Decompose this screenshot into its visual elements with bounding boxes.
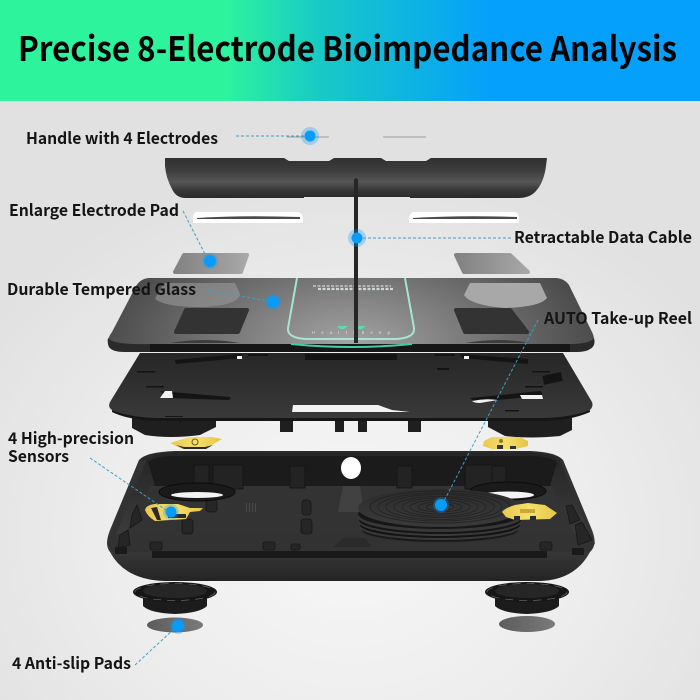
label: sensors: 4 High-precision <box>8 425 134 449</box>
callout leader lines <box>90 136 538 665</box>
callout dots <box>163 127 449 634</box>
cable hole <box>341 457 361 479</box>
frame feet <box>132 418 572 438</box>
frame slots and cut-outs <box>137 354 563 417</box>
glass electrode pads <box>155 283 547 343</box>
tray inner wall ribs <box>194 465 506 489</box>
durable tempered glass panel <box>108 278 595 352</box>
brand name: Healthkeep <box>312 330 391 336</box>
take-up reel <box>358 489 522 542</box>
label: tempered glass: Durable Tempered Glass <box>7 276 196 300</box>
gold sensors above tray <box>170 437 528 449</box>
loose electrode pads <box>175 255 528 272</box>
tray floor posts <box>118 500 592 550</box>
anti-slip pads <box>147 616 555 632</box>
retractable data cable <box>354 178 358 343</box>
label: electrode pad: Enlarge Electrode Pad <box>9 197 179 221</box>
base tray <box>107 451 595 581</box>
anti-slip feet <box>133 582 569 632</box>
label: sensors: Sensors <box>8 443 69 467</box>
label: take-up reel: AUTO Take-up Reel <box>543 305 692 329</box>
header band <box>0 0 700 101</box>
handle <box>165 158 547 198</box>
label: data cable: Retractable Data Cable <box>514 224 692 248</box>
handle electrodes: thin strips <box>287 136 426 138</box>
frame white openings <box>160 356 543 412</box>
label: handle: Handle with 4 Electrodes <box>26 125 218 149</box>
gold sensors in tray <box>145 503 557 521</box>
light streak behind hole <box>338 486 364 512</box>
electrode strips <box>193 212 519 223</box>
label: anti-slip pads: 4 Anti-slip Pads <box>12 650 131 674</box>
display digits <box>313 286 393 289</box>
middle frame <box>109 353 592 438</box>
logo <box>337 326 366 329</box>
foot mount rings <box>159 482 546 501</box>
tray front slot <box>152 551 547 558</box>
label: sensors <box>8 425 134 467</box>
mint display outline <box>288 278 414 339</box>
